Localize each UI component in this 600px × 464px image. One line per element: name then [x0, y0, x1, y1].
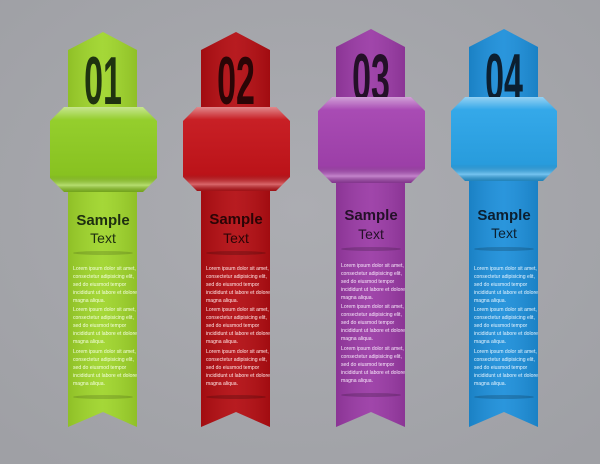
column 2: red: Text	[223, 230, 249, 246]
body text: magna aliqua.	[73, 298, 105, 304]
body text: incididunt ut labore et dolore	[73, 373, 137, 379]
body text: magna aliqua.	[73, 339, 105, 345]
band	[318, 97, 425, 183]
body text: incididunt ut labore et dolore	[474, 331, 538, 337]
body text: Lorem ipsum dolor sit amet,	[474, 349, 537, 355]
body text	[474, 266, 538, 387]
body text	[206, 266, 270, 387]
body text: magna aliqua.	[341, 295, 373, 301]
heading: Sample	[76, 212, 130, 229]
body text: Lorem ipsum dolor sit amet,	[206, 349, 269, 355]
body text: incididunt ut labore et dolore	[474, 290, 538, 296]
body text: incididunt ut labore et dolore	[474, 373, 538, 379]
body text: magna aliqua.	[206, 298, 238, 304]
column 2: red	[183, 32, 290, 427]
body text	[73, 266, 137, 387]
body text: Lorem ipsum dolor sit amet,	[73, 349, 136, 355]
body text: sed do eiusmod tempor	[73, 323, 127, 329]
body text	[341, 263, 405, 384]
body text: incididunt ut labore et dolore	[73, 331, 137, 337]
body text: sed do eiusmod tempor	[206, 365, 260, 371]
body text: sed do eiusmod tempor	[206, 323, 260, 329]
band	[451, 97, 557, 181]
ribbon	[469, 29, 538, 427]
body text: sed do eiusmod tempor	[474, 282, 528, 288]
body text: incididunt ut labore et dolore	[341, 287, 405, 293]
heading: Sample	[477, 207, 531, 224]
number: 01	[84, 43, 122, 119]
body text: Lorem ipsum dolor sit amet,	[474, 307, 537, 313]
column 1: green: Text	[90, 230, 116, 246]
body text: Lorem ipsum dolor sit amet,	[73, 307, 136, 313]
body text: incididunt ut labore et dolore	[341, 328, 405, 334]
body text: consectetur adipisicing elit,	[341, 271, 402, 277]
body text: Lorem ipsum dolor sit amet,	[73, 266, 136, 272]
body text: consectetur adipisicing elit,	[206, 357, 267, 363]
column 4: blue	[451, 29, 557, 427]
heading: Sample	[344, 207, 398, 224]
body text: consectetur adipisicing elit,	[73, 357, 134, 363]
body text: sed do eiusmod tempor	[341, 362, 395, 368]
body text: Lorem ipsum dolor sit amet,	[474, 266, 537, 272]
ribbon	[336, 29, 405, 427]
body text: incididunt ut labore et dolore	[206, 331, 270, 337]
body text: consectetur adipisicing elit,	[341, 354, 402, 360]
body text: consectetur adipisicing elit,	[73, 315, 134, 321]
body text: magna aliqua.	[474, 339, 506, 345]
ribbon	[68, 32, 137, 427]
body text: incididunt ut labore et dolore	[341, 370, 405, 376]
body text: sed do eiusmod tempor	[73, 365, 127, 371]
body text: magna aliqua.	[73, 381, 105, 387]
body text: sed do eiusmod tempor	[73, 282, 127, 288]
body text: consectetur adipisicing elit,	[206, 274, 267, 280]
body text: sed do eiusmod tempor	[341, 320, 395, 326]
body text: consectetur adipisicing elit,	[206, 315, 267, 321]
number: 03	[352, 40, 390, 116]
body text: consectetur adipisicing elit,	[474, 274, 535, 280]
body text: Lorem ipsum dolor sit amet,	[206, 307, 269, 313]
column 4: blue: Text	[491, 225, 517, 241]
body text: incididunt ut labore et dolore	[206, 373, 270, 379]
body text: magna aliqua.	[341, 336, 373, 342]
body text: magna aliqua.	[341, 378, 373, 384]
body text: magna aliqua.	[206, 339, 238, 345]
number: 02	[217, 43, 255, 119]
body text: Lorem ipsum dolor sit amet,	[341, 304, 404, 310]
body text: magna aliqua.	[474, 381, 506, 387]
body text: Lorem ipsum dolor sit amet,	[206, 266, 269, 272]
body text: incididunt ut labore et dolore	[73, 290, 137, 296]
band	[183, 107, 290, 191]
column 3: purple	[318, 29, 425, 427]
body text: Lorem ipsum dolor sit amet,	[341, 263, 404, 269]
body text: magna aliqua.	[206, 381, 238, 387]
body text: sed do eiusmod tempor	[341, 279, 395, 285]
body text: sed do eiusmod tempor	[474, 323, 528, 329]
body text: incididunt ut labore et dolore	[206, 290, 270, 296]
band	[50, 107, 157, 192]
body text: consectetur adipisicing elit,	[474, 315, 535, 321]
ribbon	[201, 32, 270, 427]
body text: sed do eiusmod tempor	[474, 365, 528, 371]
body text: consectetur adipisicing elit,	[73, 274, 134, 280]
body text: sed do eiusmod tempor	[206, 282, 260, 288]
body text: Lorem ipsum dolor sit amet,	[341, 346, 404, 352]
body text: magna aliqua.	[474, 298, 506, 304]
body text: consectetur adipisicing elit,	[474, 357, 535, 363]
heading: Sample	[209, 211, 263, 228]
body text: consectetur adipisicing elit,	[341, 312, 402, 318]
column 1: green	[50, 32, 157, 427]
column 3: purple: Text	[358, 226, 384, 242]
number: 04	[485, 40, 523, 116]
